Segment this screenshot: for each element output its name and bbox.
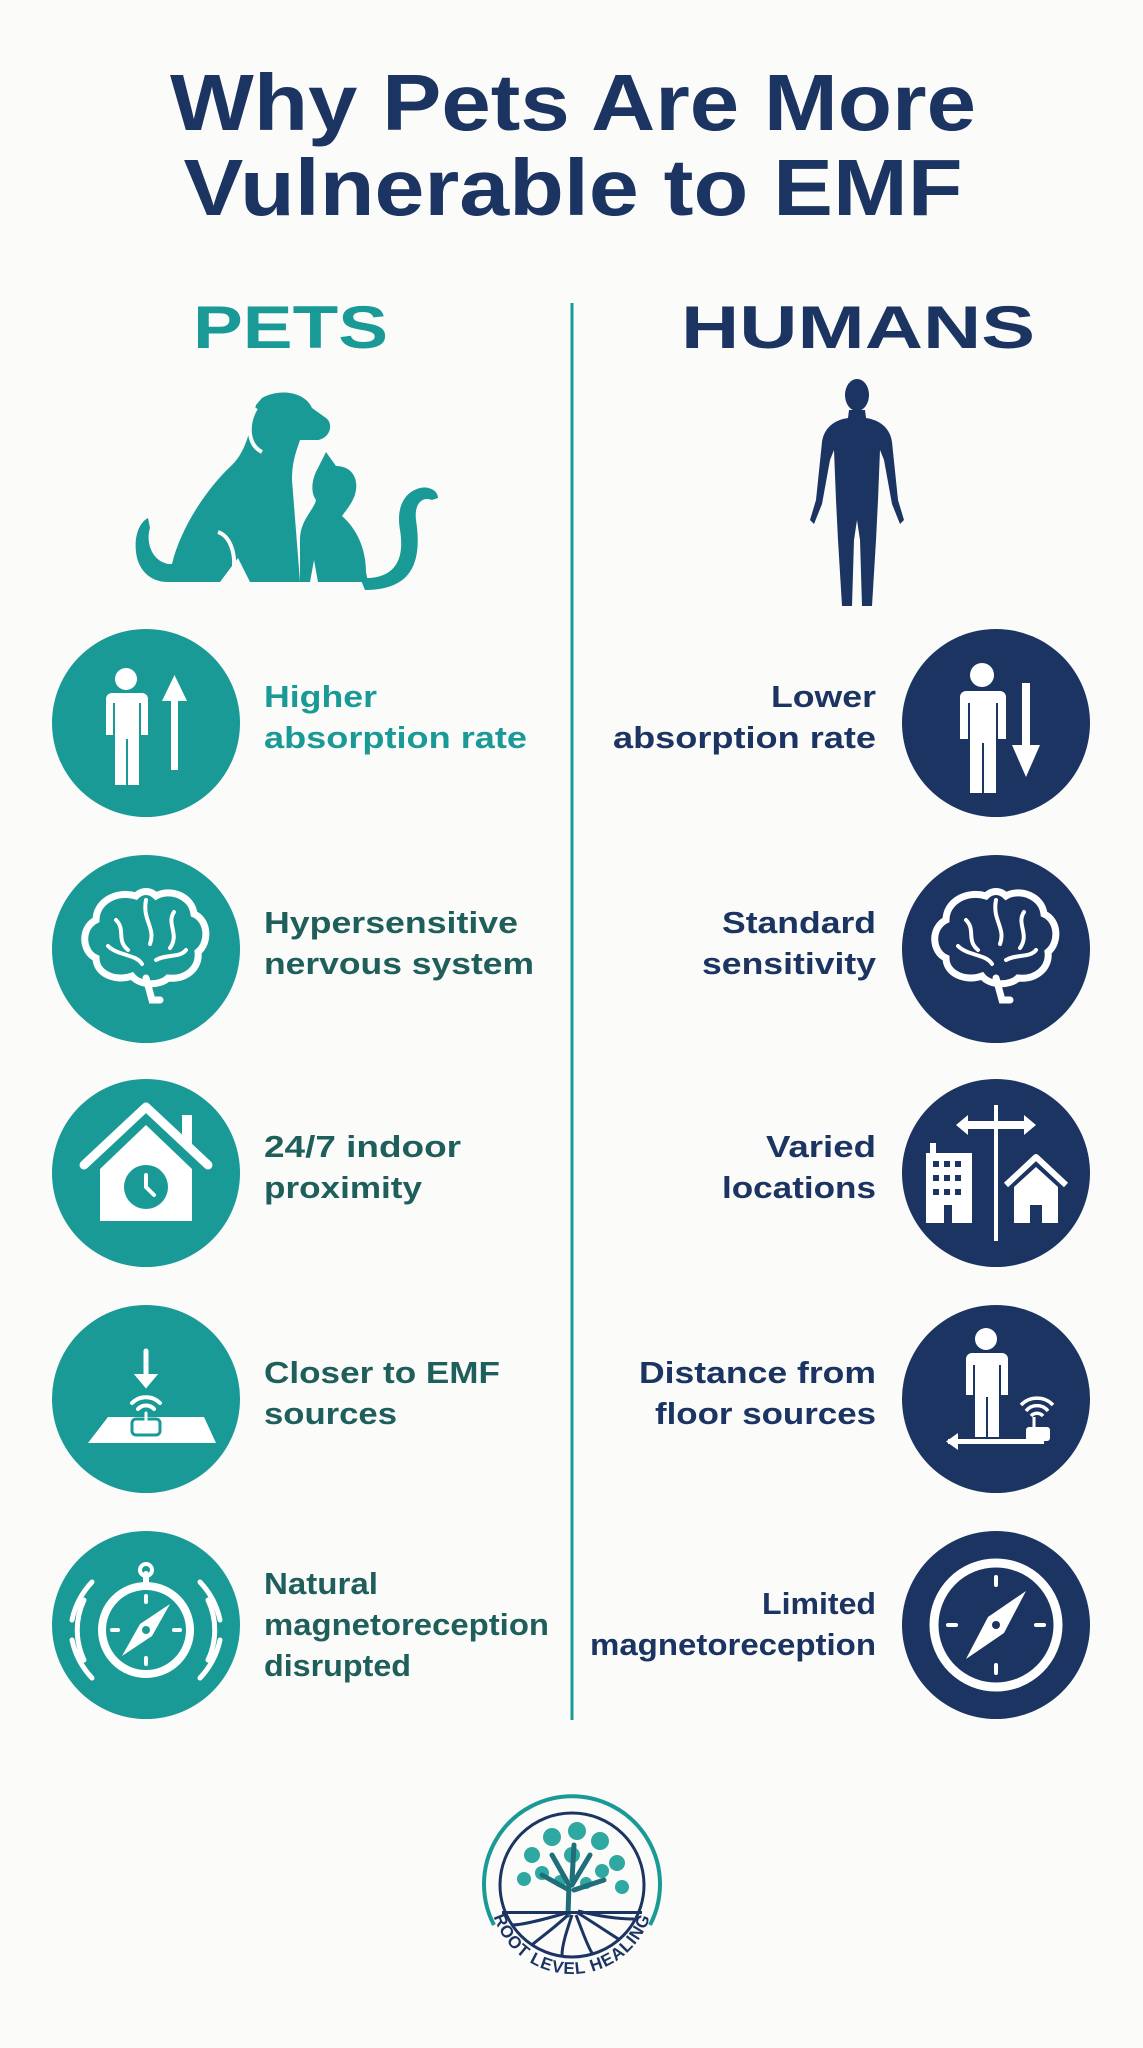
panel: pets row 4 bbox=[52, 1305, 500, 1493]
panel: humans row 5: magnetoreception bbox=[590, 1627, 876, 1662]
panel: humans row 5 bbox=[590, 1531, 1090, 1719]
panel: humans row 2: sensitivity bbox=[702, 946, 877, 981]
icon: compass bbox=[934, 1563, 1058, 1687]
panel: pets row 5 bbox=[52, 1531, 549, 1719]
panel: pets row 1: absorption rate bbox=[264, 720, 527, 755]
logo: Root Level Healing: ROOT LEVEL HEALING bbox=[494, 1914, 648, 1974]
icon: building, divider arrows and house bbox=[926, 1105, 1066, 1241]
panel: humans row 5: Limited bbox=[762, 1586, 876, 1621]
title bbox=[170, 58, 976, 232]
panel: pets row 4: sources bbox=[264, 1396, 397, 1431]
panel: humans row 3: locations bbox=[722, 1170, 876, 1205]
panel: humans row 1 bbox=[613, 629, 1090, 817]
icon: dog and cat bbox=[136, 393, 438, 590]
panel: pets row 2: Hypersensitive bbox=[264, 905, 518, 940]
icon: person with up arrow bbox=[106, 668, 187, 785]
panel: humans row 2: Standard bbox=[722, 905, 876, 940]
panel: pets row 3: 24/7 indoor bbox=[264, 1129, 461, 1164]
heading: HUMANS: HUMANS bbox=[681, 294, 1035, 361]
panel: humans row 3 bbox=[722, 1079, 1090, 1267]
title: Why Pets Are More bbox=[170, 58, 976, 147]
panel: humans row 1: absorption rate bbox=[613, 720, 876, 755]
icon: person far from floor router bbox=[946, 1328, 1053, 1450]
panel: humans row 4 bbox=[639, 1305, 1090, 1493]
panel: pets row 2 bbox=[52, 855, 534, 1043]
panel: pets row 5: Natural bbox=[264, 1566, 378, 1601]
panel: pets row 3 bbox=[52, 1079, 461, 1267]
icon: house with clock bbox=[84, 1107, 208, 1221]
icon: person with down arrow bbox=[960, 663, 1040, 793]
panel: pets row 3: proximity bbox=[264, 1170, 423, 1205]
panel: pets row 1: Higher bbox=[264, 679, 377, 714]
panel: pets row 1 bbox=[52, 629, 527, 817]
icon: disrupted compass bbox=[72, 1564, 220, 1678]
panel: humans row 4: Distance from bbox=[639, 1355, 876, 1390]
panel: pets row 2: nervous system bbox=[264, 946, 534, 981]
icon: floor router with down arrow bbox=[88, 1351, 216, 1443]
panel: pets row 5: magnetoreception bbox=[264, 1607, 549, 1642]
panel: humans row 1: Lower bbox=[771, 679, 876, 714]
icon: human silhouette bbox=[810, 379, 904, 606]
icon: brain bbox=[935, 892, 1056, 1000]
panel: humans row 4: floor sources bbox=[655, 1396, 876, 1431]
icon: brain bbox=[85, 892, 206, 1000]
title: Vulnerable to EMF bbox=[184, 143, 962, 232]
panel: pets row 5: disrupted bbox=[264, 1648, 411, 1683]
panel: humans row 2 bbox=[702, 855, 1090, 1043]
logo: Root Level Healing bbox=[482, 1794, 662, 1974]
panel: humans row 3: Varied bbox=[766, 1129, 876, 1164]
heading: PETS: PETS bbox=[193, 294, 388, 361]
panel: pets row 4: Closer to EMF bbox=[264, 1355, 500, 1390]
